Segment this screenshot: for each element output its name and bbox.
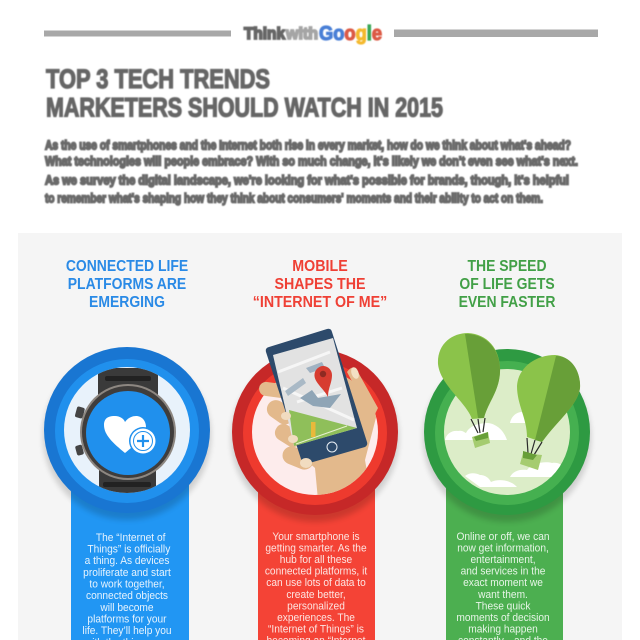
body text: speed	[456, 531, 550, 640]
icon: phone	[266, 329, 367, 464]
heading: mobile: SHAPES THE	[274, 277, 366, 293]
circle badge: smartwatch	[43, 347, 211, 520]
heading: speed of life	[459, 258, 556, 311]
body text: mobile: Your smartphone is	[272, 531, 360, 543]
body text: connected life: life. They’ll help you	[82, 625, 172, 637]
heading: connected life: EMERGING	[89, 294, 165, 311]
icon: forearm	[312, 378, 376, 495]
ribbon: connected life text	[71, 480, 189, 640]
icon: plus badge	[129, 427, 157, 455]
heading: mobile	[253, 259, 387, 311]
heading: connected life: PLATFORMS ARE	[68, 276, 186, 293]
body text: mobile: personalized	[287, 600, 345, 613]
page header: Think with Google: Think	[244, 24, 285, 43]
body text: connected life: platforms for your	[87, 613, 167, 626]
body text: connected life: to work together,	[89, 578, 165, 591]
page header: Think with Google: Google	[319, 23, 382, 45]
body text: connected life: Things” is officially	[87, 543, 171, 556]
body text: connected life: will become	[99, 602, 154, 614]
page header: Think with Google	[44, 23, 598, 45]
icon: map pin	[314, 366, 332, 397]
icon: left balloon	[438, 333, 500, 448]
icon: right balloon	[517, 355, 580, 470]
body text: speed: entertainment,	[470, 554, 536, 566]
body text: connected life: a thing. As devices	[85, 555, 169, 567]
body text: connected life: proliferate and start	[83, 567, 171, 579]
body text: speed: making happen	[468, 623, 538, 636]
body text: mobile: connected platforms, it	[265, 565, 367, 578]
circle badge: phone in hand	[231, 329, 399, 522]
heading: connected life: CONNECTED LIFE	[66, 258, 188, 275]
icon: map roads	[278, 352, 354, 420]
body text: connected life	[82, 532, 172, 640]
panel: connected life	[43, 258, 211, 640]
heading: speed of life: OF LIFE GETS	[459, 276, 555, 293]
page header: Think with Google: with	[285, 24, 318, 43]
panel: speed of life	[423, 258, 591, 640]
body text: mobile: “Internet of Things” is	[268, 623, 364, 636]
body text: mobile: getting smarter. As the	[265, 542, 367, 555]
heading: mobile: MOBILE	[292, 259, 348, 275]
title: TOP 3 TECH TRENDS	[46, 64, 270, 94]
panel: mobile	[231, 259, 399, 640]
main panel background	[18, 233, 622, 640]
circle badge: balloons	[423, 333, 591, 522]
ribbon: mobile text	[258, 480, 375, 640]
icon: heart	[104, 416, 146, 453]
heading: speed of life: EVEN FASTER	[459, 294, 556, 311]
icon: smartwatch	[98, 368, 158, 496]
heading: speed of life: THE SPEED	[467, 258, 547, 275]
icon: map green area	[289, 410, 357, 446]
body text: speed: moments of decision	[456, 612, 550, 624]
body text: mobile: experiences. The	[277, 612, 355, 624]
body text: connected life: connected objects	[86, 590, 168, 602]
body text: speed: now get information,	[457, 542, 549, 555]
title	[46, 64, 443, 122]
ribbon: speed text	[446, 480, 563, 640]
body text: mobile: can use lots of data to	[266, 577, 366, 589]
heading: mobile: “INTERNET OF ME”	[253, 295, 387, 311]
icon: thumb	[347, 368, 378, 420]
body text: mobile: hub for all these	[280, 554, 352, 566]
icon: fingertips	[281, 412, 312, 468]
body text: speed: These quick	[476, 600, 531, 613]
body text: speed: exact moment we	[463, 577, 543, 589]
body text: speed: and services in the	[461, 565, 545, 578]
icon: fingers behind phone	[258, 381, 316, 472]
body text: connected life: The “Internet of	[96, 532, 165, 544]
heading: connected life	[66, 258, 188, 311]
intro text block	[45, 138, 578, 206]
icon: clouds	[445, 412, 564, 487]
title: MARKETERS SHOULD WATCH IN 2015	[46, 92, 443, 122]
body text: speed: Online or off, we can	[456, 531, 550, 543]
body text: speed: want them.	[477, 589, 528, 601]
body text: mobile: create better,	[286, 589, 346, 601]
body text: mobile	[265, 531, 367, 640]
